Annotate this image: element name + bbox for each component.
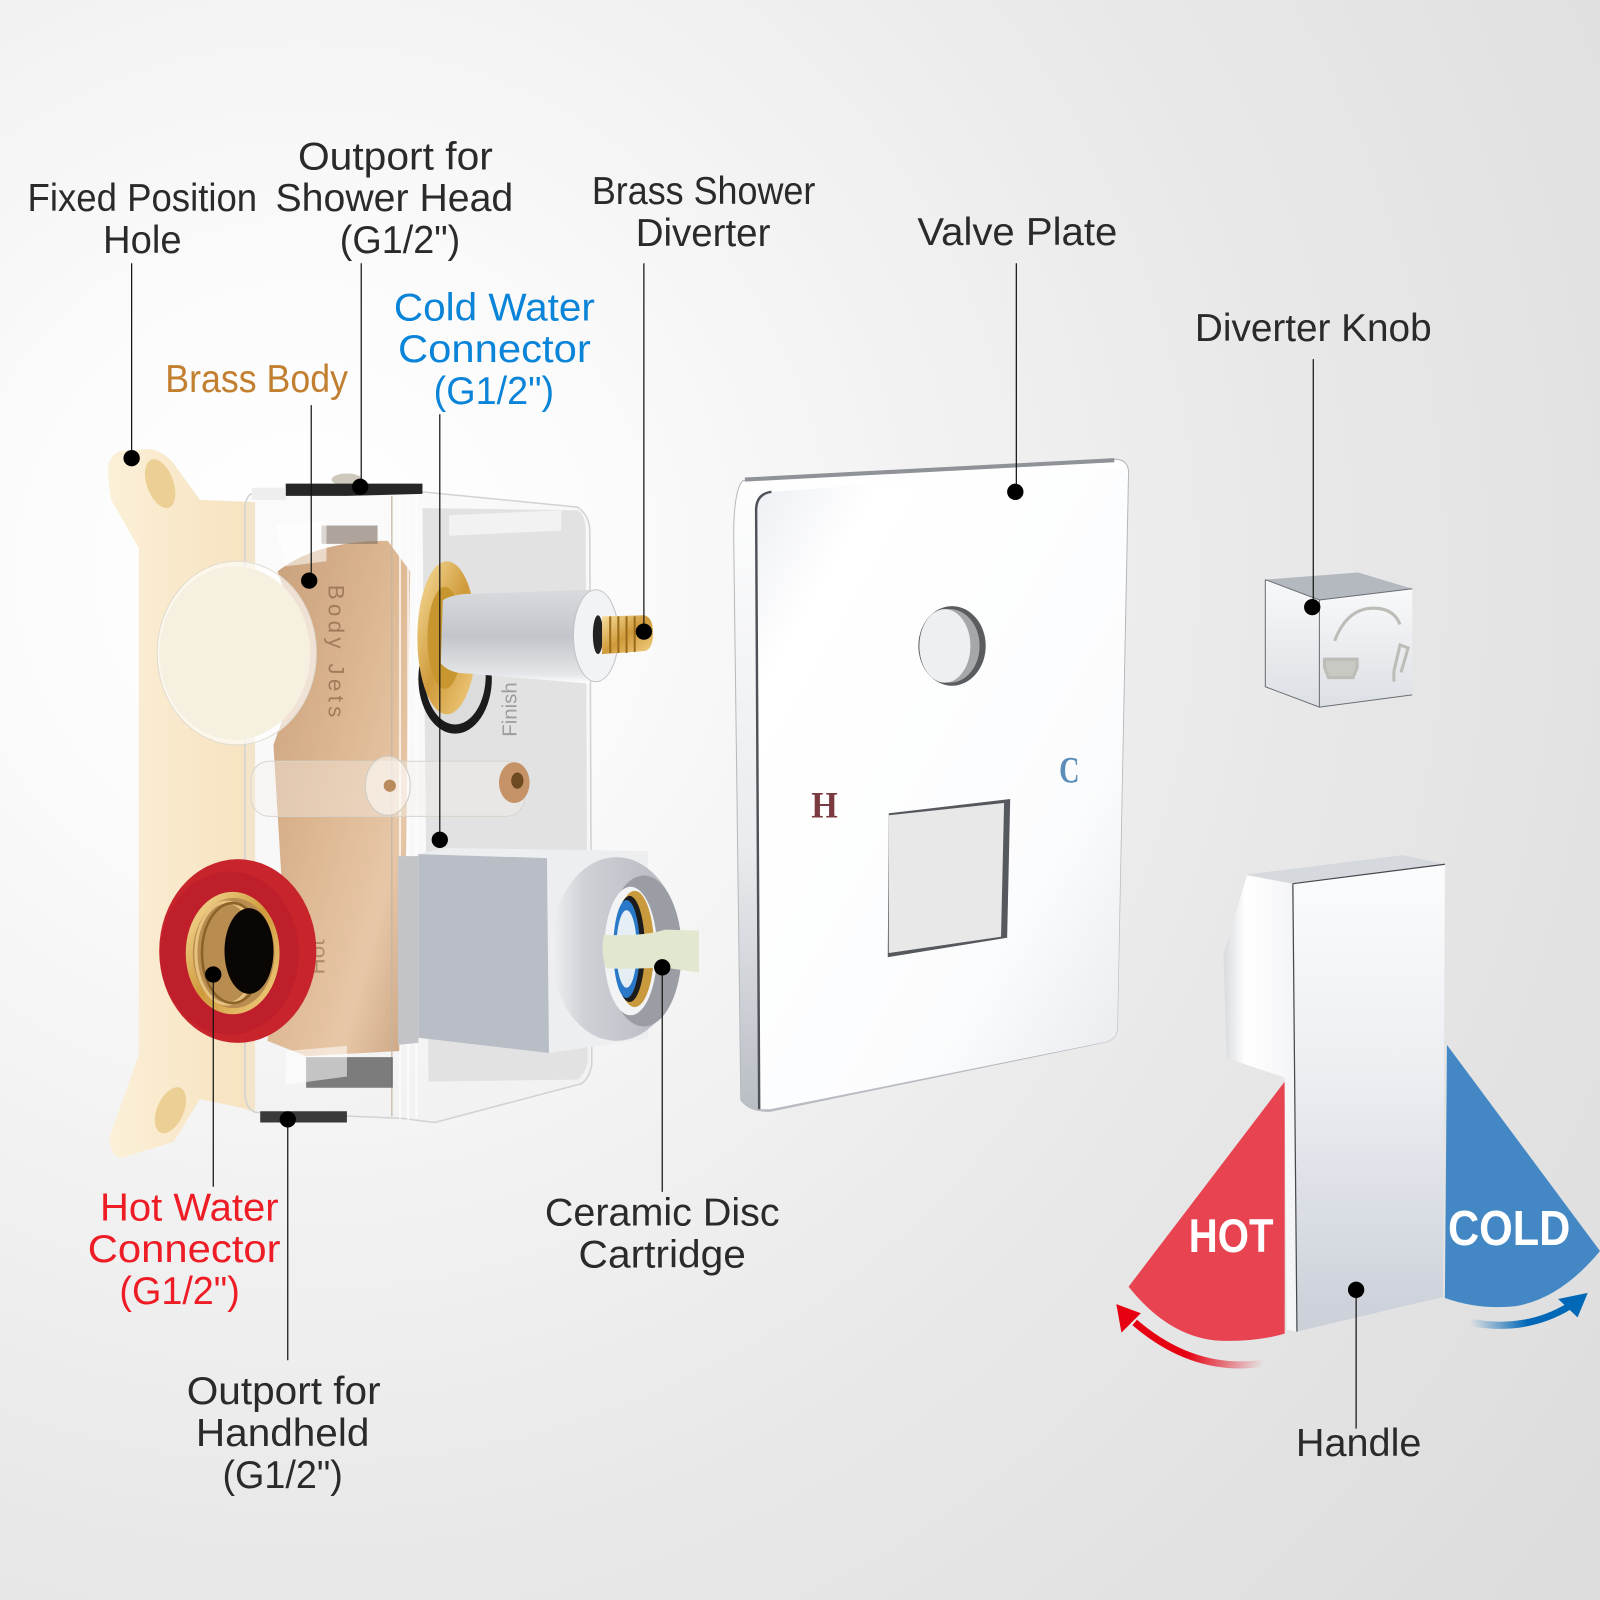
callout: ceramic disc cartridge <box>545 959 780 1276</box>
callout: cold water connector: Connector <box>398 328 591 371</box>
brass body <box>267 541 410 1056</box>
callout: brass shower diverter: Brass Shower <box>592 170 815 213</box>
embossed body text <box>304 585 521 974</box>
white plug <box>157 561 316 745</box>
callout: ceramic disc cartridge: Ceramic Disc <box>545 1192 780 1235</box>
callout: diverter knob: Diverter Knob <box>1195 307 1432 350</box>
temperature sectors <box>1129 1045 1600 1341</box>
embossed body text: Body Jets <box>324 585 349 717</box>
callout: fixed position hole: Fixed Position <box>28 177 257 220</box>
embossed body text: Finish <box>499 682 521 737</box>
callout: hot water connector: Connector <box>88 1228 281 1271</box>
callout: handle: Handle <box>1296 1422 1421 1465</box>
embossed body text: Hot <box>304 939 329 974</box>
square cut-out <box>888 799 1010 957</box>
callout: hot water connector: Hot Water <box>100 1186 279 1229</box>
silver handle mount block <box>398 848 682 1053</box>
callout: fixed position hole: Hole <box>103 219 182 262</box>
valve plate <box>734 459 1129 1111</box>
clear protective cover <box>245 473 592 1122</box>
callout: outport for shower head: (G1/2") <box>340 219 460 262</box>
COLD label: COLD <box>1448 1202 1570 1256</box>
callout: outport for handheld <box>187 1111 381 1497</box>
cold sector <box>1445 1045 1600 1307</box>
letter H: H <box>811 784 838 825</box>
red inlet ring <box>159 859 316 1043</box>
callout: cold water connector: (G1/2") <box>434 370 554 413</box>
callout: valve plate: Valve Plate <box>917 211 1117 254</box>
valve body assembly <box>108 449 699 1158</box>
diverter knob <box>1265 572 1412 707</box>
callout: outport for handheld: (G1/2") <box>222 1454 343 1497</box>
ceramic cartridge stem <box>602 930 699 972</box>
hot sector <box>1129 1082 1285 1341</box>
letter C: C <box>1059 750 1080 791</box>
callout: diverter knob <box>1195 307 1432 615</box>
callout: fixed position hole <box>28 177 257 466</box>
diverter stem <box>417 561 653 734</box>
callout: outport for handheld: Handheld <box>196 1412 369 1455</box>
callout: outport for shower head: Shower Head <box>276 177 513 220</box>
mounting plate <box>108 449 255 1158</box>
callout: outport for handheld: Outport for <box>187 1370 381 1413</box>
clear pin and nut <box>251 756 530 816</box>
top outlet <box>252 473 422 500</box>
icons: tub and hand shower <box>1324 608 1408 682</box>
HOT label: HOT <box>1189 1210 1274 1262</box>
callout: hot water connector: (G1/2") <box>119 1270 240 1313</box>
callout: brass shower diverter: Diverter <box>636 212 770 255</box>
callout: brass body: Brass Body <box>165 358 349 401</box>
callout: cold water connector <box>394 286 595 848</box>
handle <box>1223 855 1445 1332</box>
callout: handle <box>1296 1282 1421 1465</box>
callout: outport for shower head: Outport for <box>298 135 493 178</box>
bottom outlet <box>260 1111 347 1122</box>
hot arrow <box>1116 1304 1263 1365</box>
callout: outport for shower head <box>276 135 513 495</box>
callout: hot water connector <box>88 966 281 1313</box>
callout: ceramic disc cartridge: Cartridge <box>579 1233 746 1276</box>
callout: brass shower diverter <box>592 170 815 640</box>
callout: cold water connector: Cold Water <box>394 286 595 329</box>
cold arrow <box>1470 1293 1588 1325</box>
circular hole <box>918 606 986 686</box>
callout: valve plate <box>917 211 1117 500</box>
callout: brass body <box>165 358 349 589</box>
